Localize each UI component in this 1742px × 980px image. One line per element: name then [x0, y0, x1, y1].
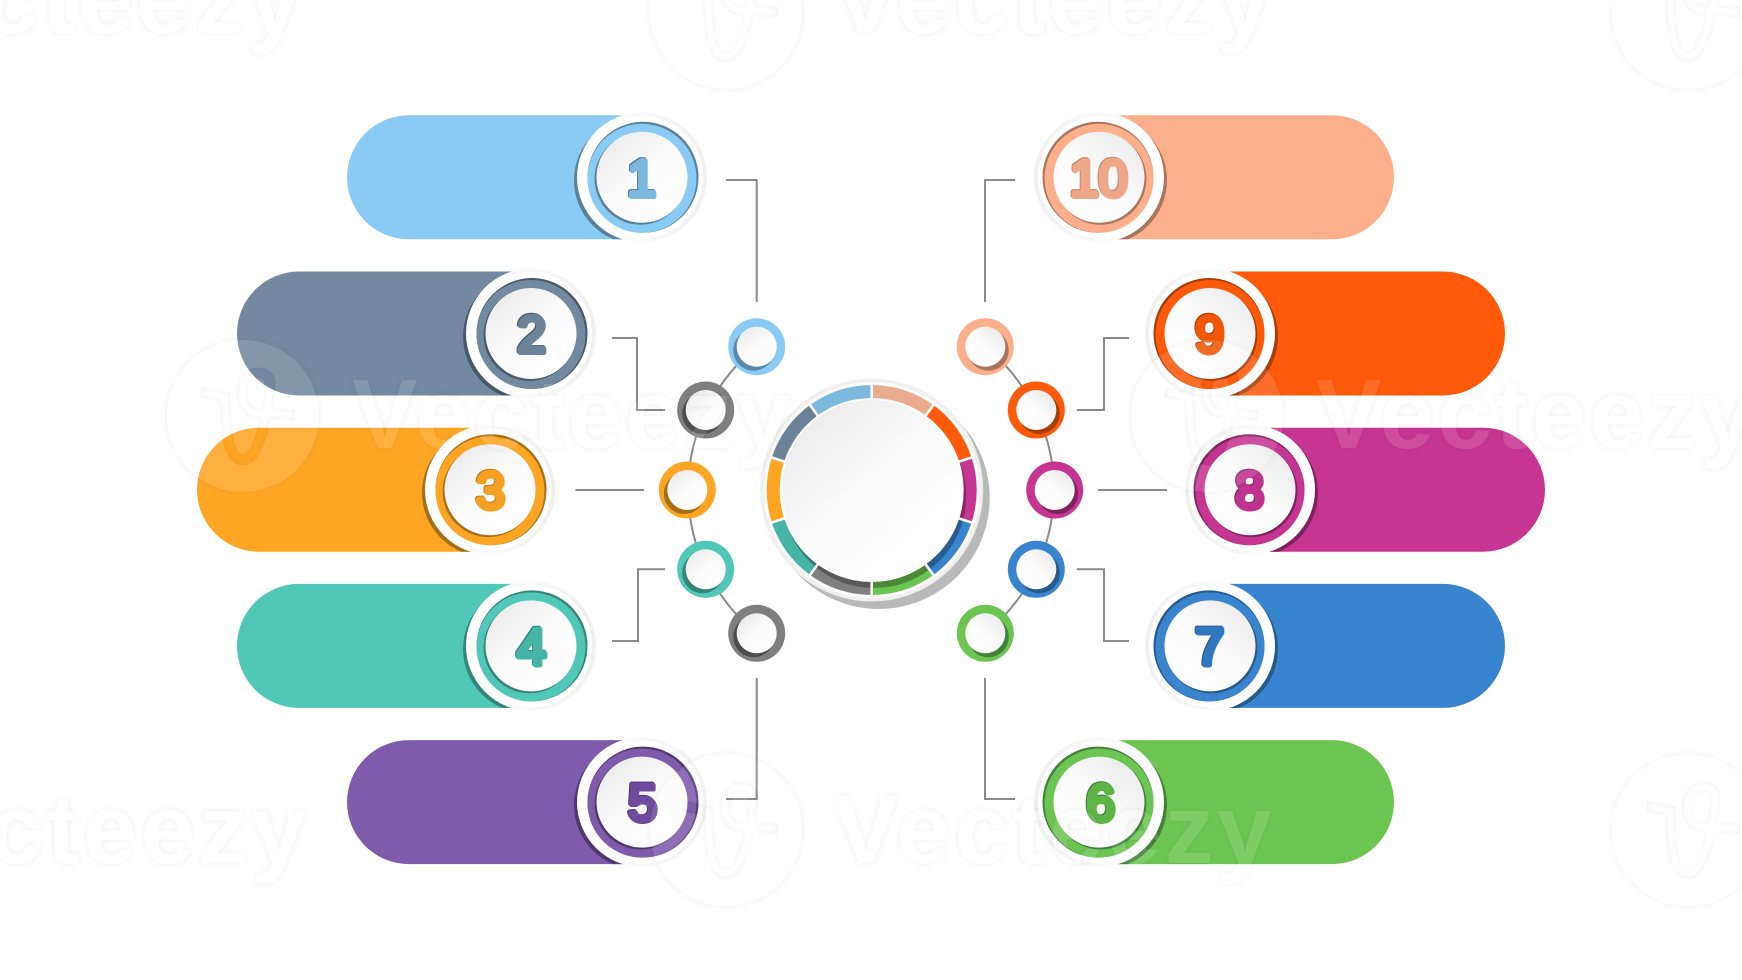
- watermark layer: Vecteezy: [352, 359, 794, 469]
- step 4 bar and badge: 4: [517, 618, 545, 676]
- node 5: [728, 605, 785, 662]
- connector: right arc linking nodes 10 to 6: [985, 347, 1054, 633]
- step 7 bar and badge: 7: [1196, 619, 1224, 677]
- connector lines: left elbows: [576, 180, 757, 799]
- node 2: [677, 382, 734, 438]
- step 10 bar and badge: [1034, 112, 1394, 244]
- step 1 bar and badge: [347, 112, 707, 244]
- connector lines: right elbows: [985, 180, 1167, 799]
- step 2 bar and badge: 2: [518, 306, 546, 364]
- step 6 bar and badge: 6: [1086, 774, 1114, 832]
- step 9 bar and badge: 9: [1195, 306, 1223, 364]
- step 3 bar and badge: 3: [477, 463, 505, 521]
- node 6: [957, 605, 1014, 662]
- step 5 bar and badge: [347, 737, 707, 869]
- step 4 bar and badge: 4: [518, 619, 546, 677]
- step 4 bar and badge: [237, 581, 596, 713]
- step 1 bar and badge: 1: [628, 150, 656, 208]
- step 8 bar and badge: 8: [1236, 463, 1264, 521]
- step 1 bar and badge: 1: [627, 149, 655, 207]
- node 4: [677, 541, 734, 598]
- step 3 bar and badge: [197, 425, 555, 557]
- central ring with ten coloured segments: [760, 378, 990, 609]
- node 10: [957, 318, 1014, 375]
- step 8 bar and badge: [1185, 425, 1545, 557]
- step 3 bar and badge: 3: [476, 462, 504, 520]
- node 9: [1008, 382, 1065, 438]
- step 10 bar and badge: 10: [1070, 150, 1128, 208]
- step 8 bar and badge: 8: [1235, 462, 1263, 520]
- connector: left arc linking nodes 1 to 5: [688, 347, 757, 633]
- watermark layer: Vecteezy: [833, 774, 1275, 884]
- node 1: [728, 318, 785, 375]
- step 2 bar and badge: [237, 268, 596, 400]
- step 2 bar and badge: 2: [517, 306, 545, 364]
- step 6 bar and badge: [1034, 737, 1394, 869]
- step 7 bar and badge: 7: [1195, 618, 1223, 676]
- step 9 bar and badge: 9: [1196, 306, 1224, 364]
- step 5 bar and badge: 5: [628, 774, 656, 832]
- step 5 bar and badge: 5: [629, 775, 657, 833]
- step 6 bar and badge: 6: [1087, 775, 1115, 833]
- step 10 bar and badge: 10: [1069, 149, 1127, 207]
- step 9 bar and badge: [1145, 268, 1505, 400]
- node 8: [1026, 462, 1083, 518]
- step 7 bar and badge: [1145, 581, 1505, 713]
- node 7: [1008, 541, 1065, 598]
- node 3: [659, 462, 716, 518]
